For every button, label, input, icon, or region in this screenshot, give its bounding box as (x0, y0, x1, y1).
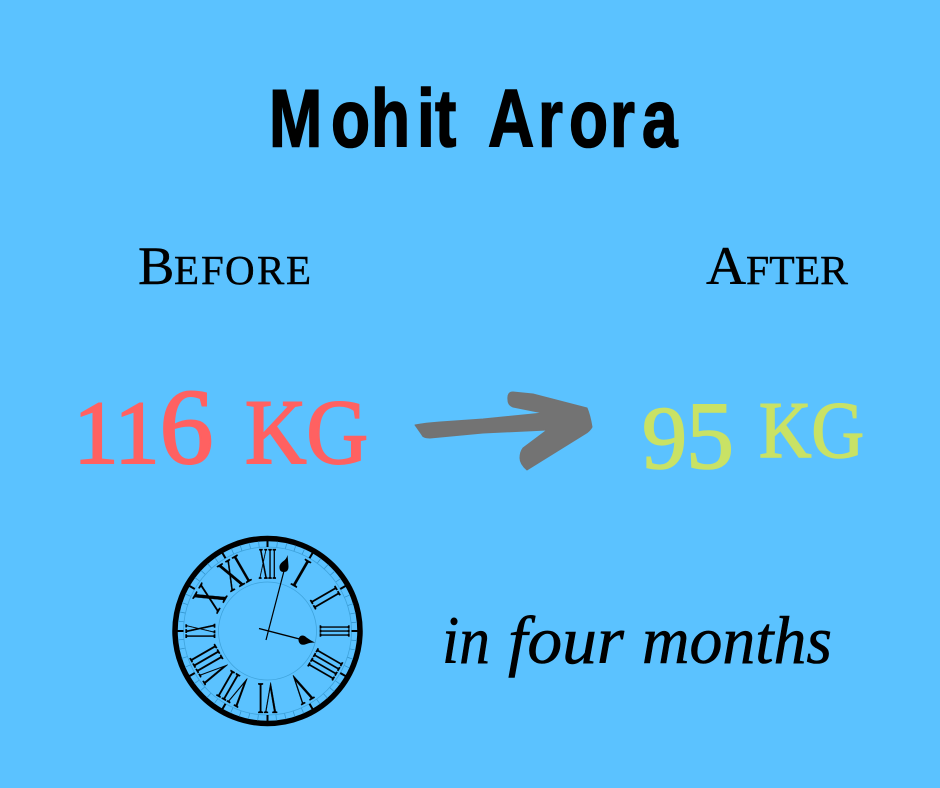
before weight value: 1 (74, 384, 118, 483)
roman numerals: X (182, 575, 237, 620)
hour hand (259, 628, 315, 645)
roman numerals: IX (176, 624, 226, 638)
arrow (415, 392, 592, 470)
after weight value: KG (759, 387, 864, 475)
roman numerals: VI (258, 673, 278, 723)
roman numerals: VII (210, 661, 258, 717)
caption: in four months (442, 602, 832, 678)
before weight value: 6 (160, 368, 214, 487)
caption: in four months: in (442, 602, 490, 678)
roman numerals: VIII (180, 638, 239, 691)
roman numerals: III (310, 625, 360, 637)
title: Mohit Arora (269, 72, 679, 164)
roman numerals: I (285, 549, 317, 597)
roman numerals: IIII (298, 642, 353, 687)
hour ticks (176, 540, 358, 722)
after weight value: 5 (686, 382, 734, 489)
roman numerals (176, 539, 360, 723)
roman numerals: XII (258, 539, 276, 589)
roman numerals: V (282, 663, 320, 715)
before weight value: 1 (114, 384, 160, 483)
heading: after: AFTER (706, 235, 849, 296)
heading: before: BEFORE (138, 235, 311, 296)
after weight value (642, 382, 864, 489)
caption: in four months: four (508, 602, 625, 678)
icon: clock (175, 538, 360, 724)
after weight value: 9 (642, 389, 687, 488)
roman numerals: II (301, 580, 350, 615)
caption: in four months: months (642, 602, 832, 678)
before weight value (74, 368, 368, 487)
before weight value: KG (245, 381, 368, 483)
minute hand (266, 555, 288, 640)
roman numerals: XI (210, 545, 258, 601)
